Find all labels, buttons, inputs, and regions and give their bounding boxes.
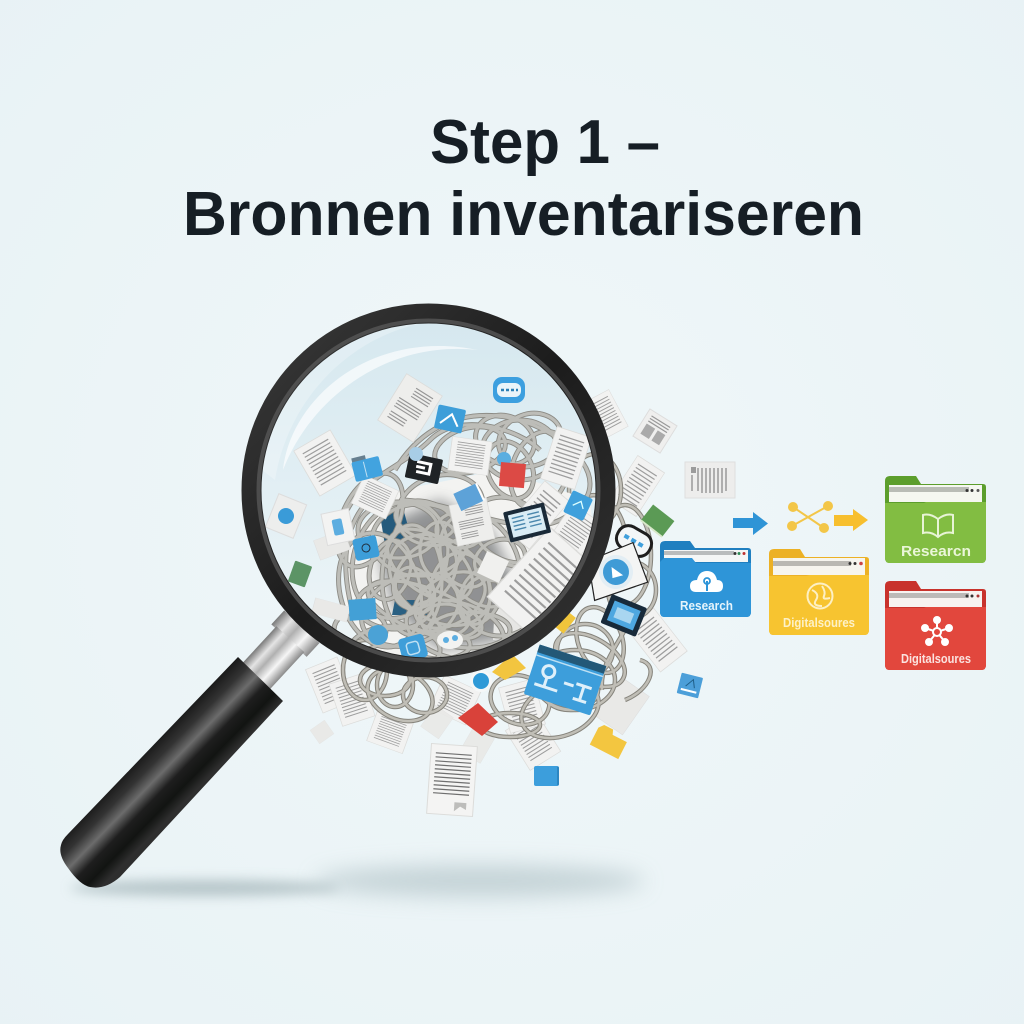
folder: green research: Researcn: [901, 543, 971, 560]
tangled cables inside lens: [332, 410, 592, 658]
icon: red folder lower: [458, 703, 498, 736]
icon: yellow folder lower: [590, 723, 629, 759]
title: [183, 108, 864, 249]
scattered documents outside the lens: [305, 390, 735, 817]
icon: blue tablet: [600, 594, 647, 637]
icon: black tile: [405, 453, 443, 484]
icon: small blue folder: [534, 766, 559, 786]
folder: yellow digital sources: [769, 549, 869, 635]
arrow: blue: [733, 512, 768, 535]
icon: yellow stub: [555, 611, 576, 634]
icon: blue page: [453, 483, 484, 511]
folder: red digital sources: [885, 581, 986, 670]
icon: yellow folder behind lens: [492, 654, 526, 680]
icon: blue circle: [470, 670, 492, 692]
arrow: yellow: [834, 509, 868, 531]
magnifying glass handle: [60, 610, 320, 888]
folder: red digital sources: Digitalsoures: [901, 651, 971, 666]
chrome neck: [237, 610, 320, 694]
icons outside the lens: [458, 505, 703, 786]
icon: cloud: [690, 571, 723, 592]
pile under the lens: [345, 470, 592, 656]
lens with contents: [262, 322, 602, 663]
icon: blue browser window: [524, 644, 606, 716]
icon: network cross: [788, 502, 832, 532]
icon: red folder: [409, 447, 526, 488]
icon: blue badge: [493, 377, 525, 403]
icon: play circle card: [583, 542, 649, 600]
folder: yellow digital sources: Digitalsoures: [783, 615, 855, 630]
ground shadow: [70, 865, 645, 897]
icon: blue folder: [350, 452, 383, 482]
title: Step 1 –: [430, 108, 660, 177]
folder: blue research: [660, 541, 751, 617]
title: Bronnen inventariseren: [183, 180, 864, 249]
folder: green research: [885, 476, 986, 563]
icon: open book: [923, 514, 953, 537]
icon: green book: [641, 505, 674, 537]
folder: blue research: Research: [680, 599, 733, 613]
lens highlight: [262, 322, 478, 480]
icon: black tablet: [503, 502, 551, 543]
tangled cables outside lens: [343, 454, 656, 748]
icon: blue chart tile: [434, 404, 466, 434]
icon: blue edge tile: [563, 490, 593, 521]
icon: hub network: [922, 617, 952, 645]
lens documents: [265, 374, 602, 663]
icon: globe: [808, 584, 832, 608]
icon: outlined badge: [612, 522, 656, 560]
icon: small blue tile: [677, 673, 703, 698]
glass tint: [260, 322, 596, 658]
magnifying glass ring: [252, 314, 606, 668]
black grip: [60, 657, 283, 888]
